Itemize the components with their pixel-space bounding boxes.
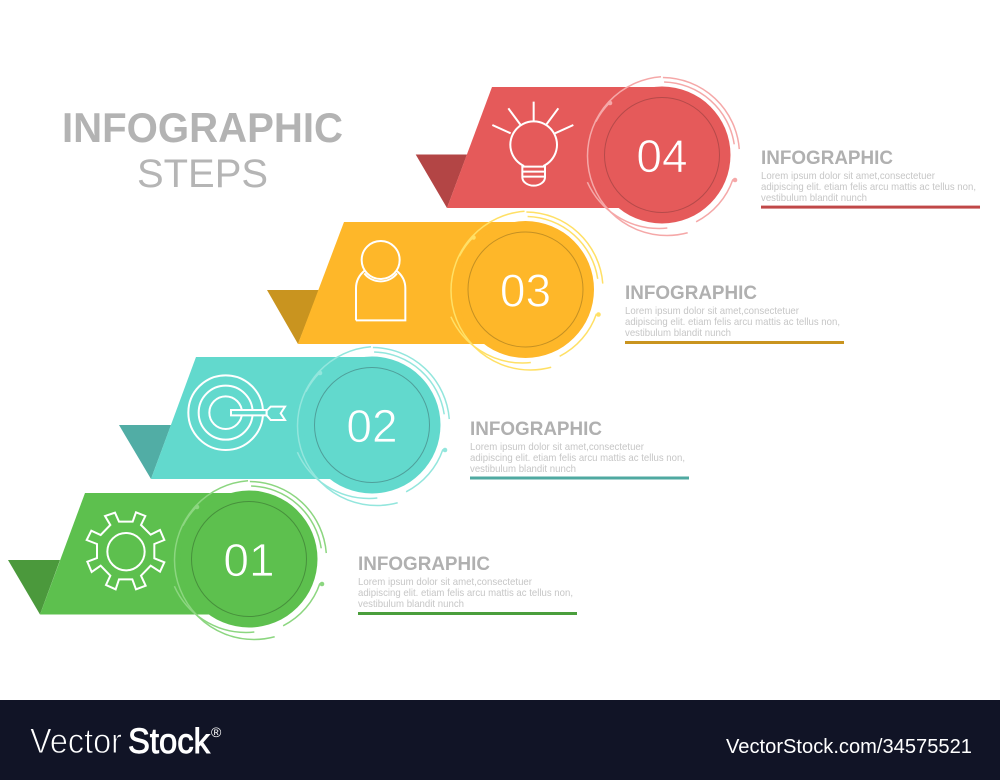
footer logo: Vector bbox=[30, 722, 122, 761]
step 04 ribbon bbox=[416, 72, 746, 236]
step 03 text bbox=[625, 282, 844, 344]
ribbon fold bbox=[416, 154, 467, 208]
ribbon band bbox=[40, 493, 249, 614]
step 03 ribbon bbox=[267, 206, 610, 370]
ribbon band bbox=[151, 357, 372, 479]
footer url: VectorStock.com/34575521 bbox=[726, 736, 972, 758]
step 04 text: vestibulum blandit nunch bbox=[761, 192, 867, 204]
icon: gear bbox=[87, 512, 164, 589]
step 01 text: INFOGRAPHIC bbox=[358, 553, 490, 575]
step 01 text: Lorem ipsum dolor sit amet,consectetuer bbox=[358, 576, 532, 588]
step 03 text: adipiscing elit. etiam felis arcu mattis ac tellus non, bbox=[625, 316, 840, 328]
number circle: 01 bbox=[223, 534, 275, 586]
step 03 text: INFOGRAPHIC bbox=[625, 282, 757, 304]
step 01 text: vestibulum blandit nunch bbox=[358, 598, 464, 610]
icon: person bbox=[356, 241, 405, 320]
step 04 text bbox=[761, 147, 980, 209]
title bbox=[62, 105, 343, 196]
ribbon fold bbox=[8, 560, 60, 614]
step 03 text: vestibulum blandit nunch bbox=[625, 327, 731, 339]
step 04 text: INFOGRAPHIC bbox=[761, 147, 893, 169]
step 01 text: adipiscing elit. etiam felis arcu mattis ac tellus non, bbox=[358, 587, 573, 599]
icon: target and dart bbox=[188, 375, 285, 450]
number circle: 03 bbox=[500, 264, 551, 316]
step 02 text: adipiscing elit. etiam felis arcu mattis ac tellus non, bbox=[470, 452, 685, 464]
step 02 text: INFOGRAPHIC bbox=[470, 418, 602, 440]
icon: light bulb bbox=[492, 102, 573, 186]
ribbon fold bbox=[267, 290, 319, 344]
number circle bbox=[444, 206, 610, 370]
ribbon band bbox=[447, 87, 662, 208]
footer bar bbox=[0, 700, 1000, 780]
ribbon fold bbox=[119, 425, 171, 479]
step 04 text: adipiscing elit. etiam felis arcu mattis ac tellus non, bbox=[761, 181, 976, 193]
number circle bbox=[168, 476, 334, 640]
number circle: 04 bbox=[636, 130, 688, 182]
footer logo: Stock bbox=[128, 722, 210, 761]
step 02 text: vestibulum blandit nunch bbox=[470, 463, 576, 475]
ribbon band bbox=[298, 222, 526, 344]
title: STEPS bbox=[137, 152, 268, 196]
footer logo: ® bbox=[211, 724, 222, 740]
step 02 ribbon bbox=[119, 342, 456, 506]
footer logo bbox=[30, 722, 222, 761]
step 04 text: Lorem ipsum dolor sit amet,consectetuer bbox=[761, 170, 935, 182]
step 02 text: Lorem ipsum dolor sit amet,consectetuer bbox=[470, 441, 644, 453]
step 02 text bbox=[470, 418, 689, 480]
number circle bbox=[580, 72, 746, 236]
number circle bbox=[290, 342, 456, 506]
step 01 text bbox=[358, 553, 577, 615]
number circle: 02 bbox=[346, 400, 398, 452]
step 01 ribbon bbox=[8, 476, 334, 640]
title: INFOGRAPHIC bbox=[62, 105, 343, 151]
step 03 text: Lorem ipsum dolor sit amet,consectetuer bbox=[625, 305, 799, 317]
